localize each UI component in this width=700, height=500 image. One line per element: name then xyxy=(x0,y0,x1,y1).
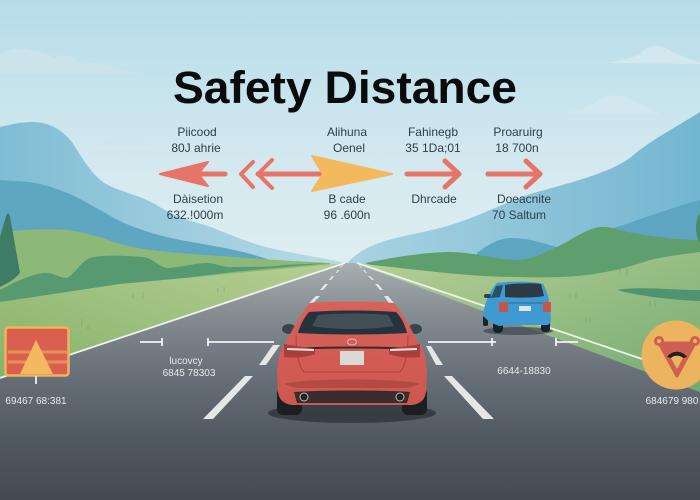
hills: left bushes xyxy=(0,256,330,302)
mirrors xyxy=(282,324,296,334)
labels above arrows: Alihuna xyxy=(327,125,367,139)
labels above arrows: Fahinegb xyxy=(408,125,458,139)
cloud: mid left xyxy=(88,134,155,146)
grass tufts xyxy=(82,268,655,330)
arrow: right two xyxy=(488,161,540,187)
labels below arrows: Dàisetion xyxy=(173,192,223,206)
tree: left xyxy=(0,213,20,287)
labels above arrows: 80J ahrie xyxy=(171,141,221,155)
labels below arrows: Dhrcade xyxy=(411,192,457,206)
car body xyxy=(277,302,427,405)
red car xyxy=(268,302,436,423)
lane dashes xyxy=(203,265,494,419)
mountains: right front ridge xyxy=(477,200,700,300)
sign caption: right: 684679 980 xyxy=(646,396,699,407)
road xyxy=(0,263,700,500)
bumper crease xyxy=(284,380,420,388)
tree: right edge xyxy=(696,212,700,244)
badge xyxy=(348,339,356,345)
labels below arrows: Doeacnite xyxy=(497,192,551,206)
mountains: left back range xyxy=(0,122,350,300)
hills: right green xyxy=(365,227,700,360)
labels above arrows: 35 1Da;01 xyxy=(405,141,461,155)
sign caption: left: 69467 68:381 xyxy=(5,396,67,407)
tires xyxy=(277,388,302,415)
labels above arrows: Oenel xyxy=(333,141,365,155)
licence plate xyxy=(340,351,364,365)
lower bumper xyxy=(294,390,410,403)
labels above arrows: Proaruirg xyxy=(493,125,543,139)
arrow: double chevron left xyxy=(241,160,322,188)
grass: right verge xyxy=(355,252,700,392)
hills: left green xyxy=(0,229,330,310)
cloud: upper right xyxy=(610,46,700,64)
cloud: upper left xyxy=(0,48,142,74)
road caption: left xyxy=(163,356,216,379)
arrow: solid left xyxy=(160,162,225,186)
labels above arrows: Piicood xyxy=(177,125,217,139)
road caption: right: 6644-18830 xyxy=(497,366,551,377)
grass: left verge xyxy=(0,263,345,378)
trunk outline xyxy=(296,335,408,372)
arrow: right one xyxy=(407,161,459,187)
blue car xyxy=(483,282,553,335)
labels below arrows: 70 Saltum xyxy=(492,208,546,222)
road edge lines xyxy=(0,263,645,378)
cloud: mid right xyxy=(556,96,662,114)
rear window xyxy=(298,310,407,334)
mountains: left mid range xyxy=(0,180,275,300)
sky background xyxy=(0,0,700,300)
car shadow xyxy=(268,403,436,423)
tail lights xyxy=(284,344,315,358)
shadow band on right grass xyxy=(617,288,700,301)
labels below arrows: 96 .600n xyxy=(324,208,370,222)
road caption: left: lucovcy xyxy=(169,356,203,367)
trunk lip xyxy=(296,348,412,349)
mountains: right back range xyxy=(345,112,700,300)
title: Safety Distance xyxy=(173,62,517,113)
labels above arrows xyxy=(171,125,543,155)
arrow: yellow wedge xyxy=(312,156,392,191)
sign: right circle xyxy=(642,320,700,390)
road caption: left: 6845 78303 xyxy=(163,368,216,379)
measurement line: left xyxy=(140,338,274,346)
sign: left warning xyxy=(6,328,68,384)
labels above arrows: 18 700n xyxy=(495,141,539,155)
labels below arrows: 632.!000m xyxy=(167,208,223,222)
labels below arrows xyxy=(167,192,551,222)
labels below arrows: B cade xyxy=(328,192,366,206)
measurement line: right xyxy=(428,338,578,346)
